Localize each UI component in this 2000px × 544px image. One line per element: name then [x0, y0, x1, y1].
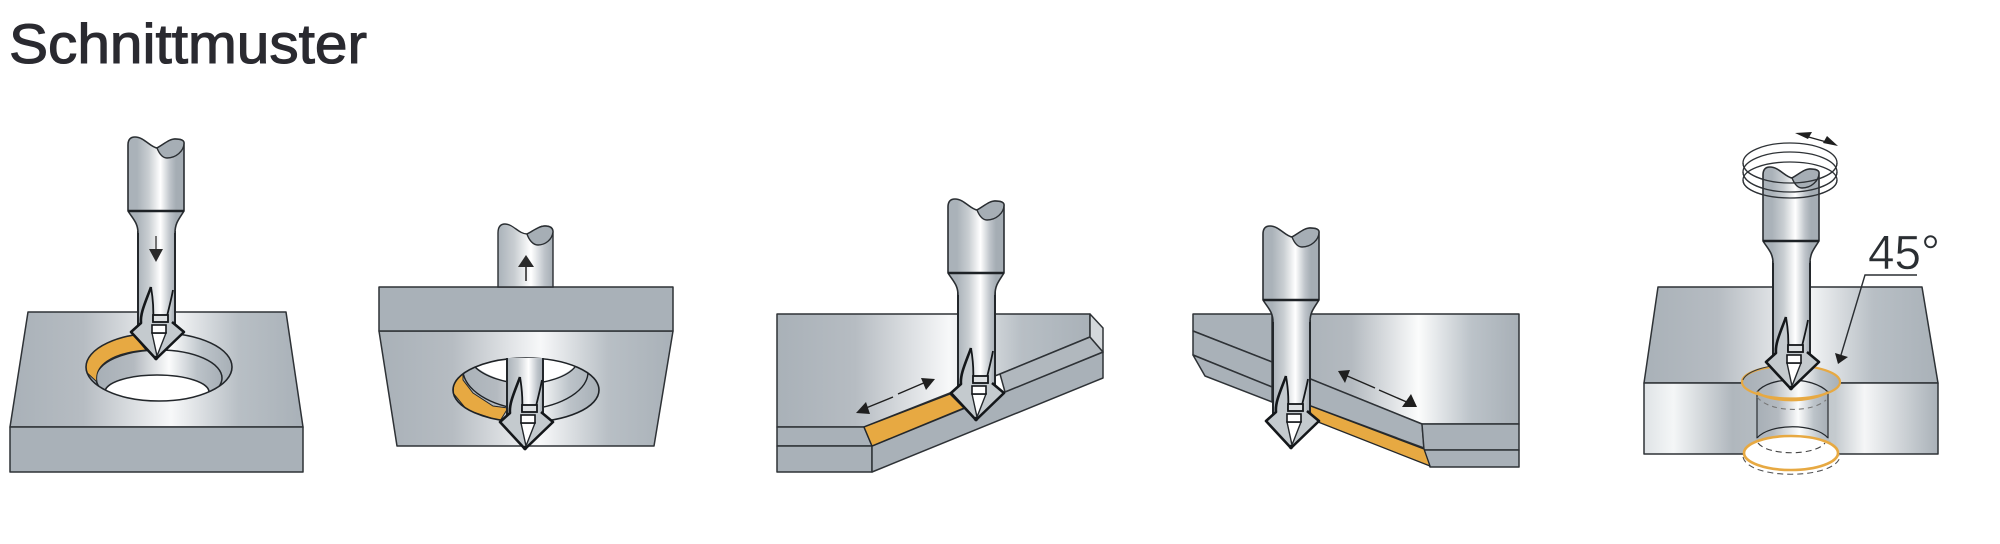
chamfer tool [1763, 167, 1819, 390]
leader arrow to chamfer [1835, 275, 1917, 364]
panel: back chamfering along an edge [1193, 226, 1519, 467]
chamfer tool shank above workpiece [498, 224, 553, 287]
arrow: feed down [149, 236, 163, 262]
workpiece block [10, 312, 303, 472]
chamfer tool [128, 137, 184, 360]
panel: circular chamfering of a through hole, both sides [1644, 132, 1940, 474]
hole with orange chamfer [448, 355, 604, 422]
workpiece block [1644, 287, 1938, 454]
arrow: rotation direction [1795, 132, 1838, 146]
45 degree label: 45° [1868, 227, 1940, 280]
chamfer tool [948, 199, 1004, 421]
chamfer tool [1263, 226, 1319, 449]
arrow: travel direction [856, 378, 935, 414]
workpiece block seen from below [379, 287, 673, 446]
panel: back chamfering of a hole from below [379, 224, 673, 450]
arrow: travel direction [1338, 370, 1417, 407]
title: Schnittmuster [9, 12, 367, 75]
orange chamfer strip [1308, 405, 1430, 466]
rotation path behind tool [1743, 143, 1837, 198]
workpiece block with bevel [1193, 314, 1519, 467]
through hole with upper and lower orange chamfers [1742, 365, 1840, 474]
arrow: feed up [518, 255, 534, 281]
workpiece block with bevel [777, 314, 1103, 472]
panel: plunge chamfering of a hole from above [10, 137, 303, 472]
countersunk hole with orange chamfer [85, 334, 233, 402]
panel: front chamfering along an edge [777, 199, 1103, 472]
rotation path in front of tool [1743, 163, 1837, 198]
chamfer tool neck and head [500, 358, 553, 450]
orange chamfer strip [864, 394, 964, 446]
